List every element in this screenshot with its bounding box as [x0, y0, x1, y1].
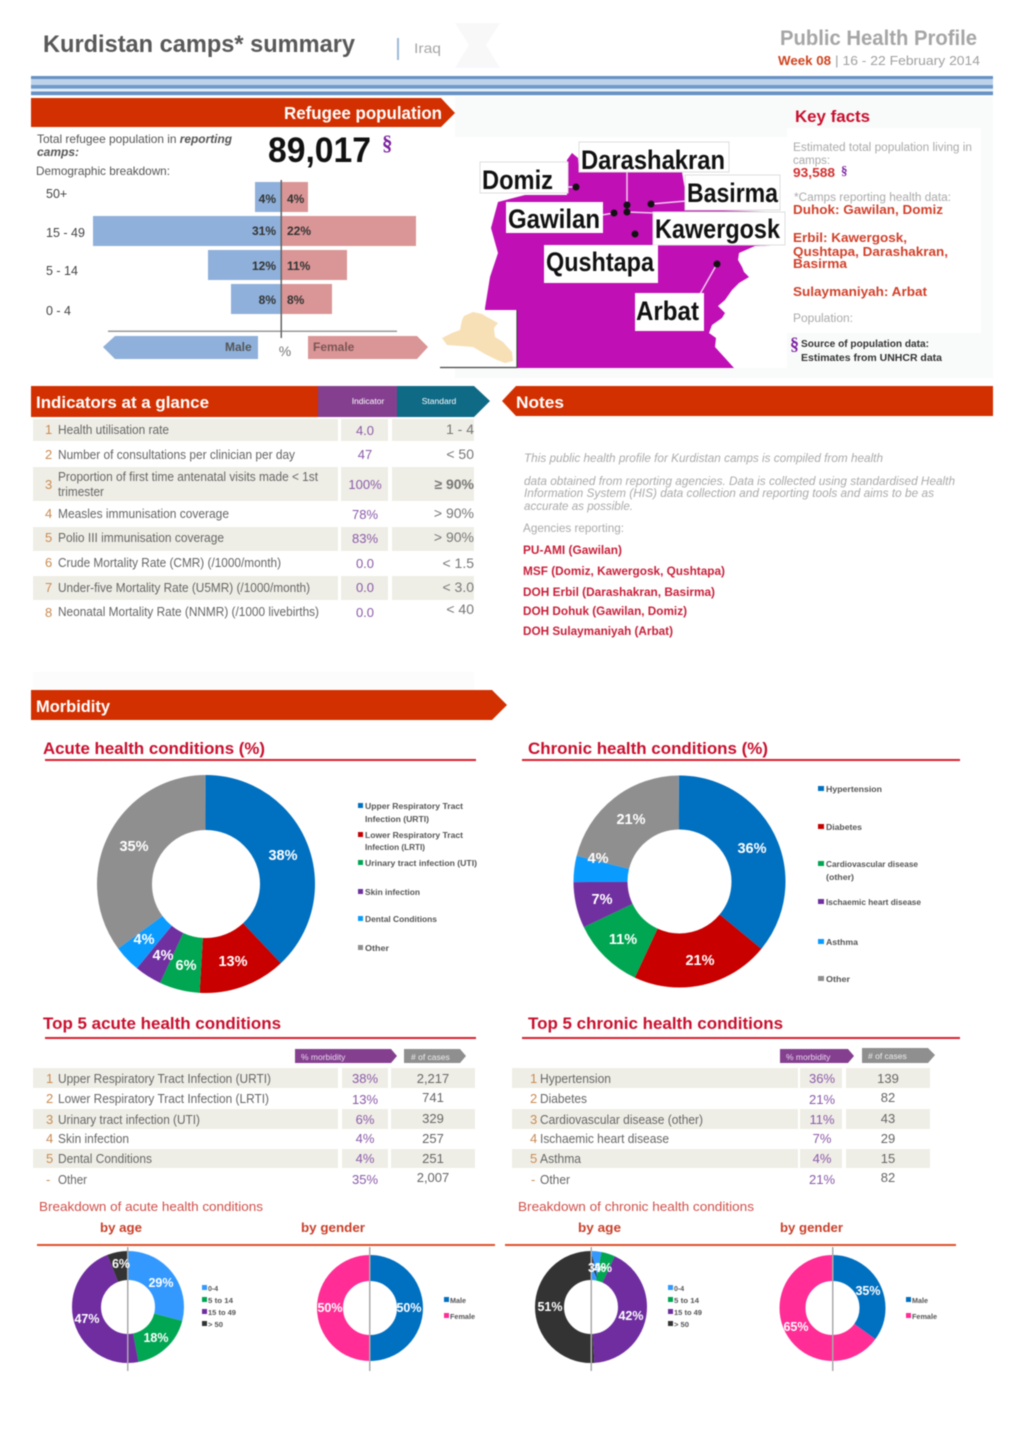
indicators table [33, 419, 475, 620]
population pyramid: 4% [287, 192, 305, 206]
donut chart: acute by age: 6% [112, 1257, 130, 1271]
indicators table: 83% [352, 531, 378, 546]
indicators table: ≥ 90% [434, 476, 475, 492]
panel: breakdown of chronic conditions [505, 1199, 956, 1371]
donut chart: chronic by age: 4% [594, 1261, 612, 1275]
key facts box: Estimated total population living in [793, 142, 972, 154]
population pyramid: 31% [252, 224, 276, 238]
panel: top 5 acute [33, 1014, 476, 1187]
label: Kawergosk: Kawergosk [655, 214, 781, 244]
legend: chronic: Asthma [826, 938, 859, 947]
indicators table: Neonatal Mortality Rate (NNMR) (/1000 livebirths) [58, 605, 319, 619]
table: top 5 acute: Skin infection [58, 1132, 129, 1146]
indicators table: Number of consultations per clinician per day [58, 448, 296, 462]
donut chart: acute: 6% [176, 958, 197, 974]
legend: acute by gender: Male [450, 1298, 466, 1305]
total figure: § [382, 131, 392, 155]
donut chart: chronic by gender [783, 1247, 881, 1371]
reporting agencies [523, 545, 725, 638]
notes text: Agencies reporting: [523, 521, 624, 535]
legend: chronic by gender: Female [912, 1314, 937, 1321]
legend: chronic: Ischaemic heart disease [826, 898, 922, 907]
table: top 5 acute: 251 [422, 1151, 444, 1166]
donut chart: acute: 4% [134, 932, 155, 948]
table: top 5 acute: - [46, 1172, 50, 1187]
donut chart: acute: 35% [119, 839, 149, 855]
indicators table: 4.0 [356, 423, 374, 438]
notes text [523, 451, 955, 535]
key facts box: 93,588 [793, 166, 835, 180]
population pyramid: 15 - 49 [46, 226, 85, 240]
report title: Public Health Profile [780, 27, 977, 50]
indicators table: < 50 [446, 446, 474, 462]
table: top 5 chronic: Asthma [540, 1152, 581, 1166]
reporting agencies: DOH Dohuk (Gawilan, Domiz) [523, 606, 687, 618]
heading: top 5 chronic: Top 5 chronic health conditions [528, 1014, 783, 1033]
heading: indicators bar: Indicators at a glance [36, 393, 209, 412]
legend: acute by age: 5 to 14 [208, 1298, 233, 1305]
total refugee text: camps: [37, 145, 79, 159]
donut chart: acute by age: 18% [143, 1331, 169, 1345]
heading: notes bar [502, 386, 993, 416]
heading: indicators bar: Indicator [352, 396, 384, 406]
legend: chronic: Hypertension [826, 785, 882, 794]
table: top 5 chronic: 29 [881, 1131, 895, 1146]
heading: notes bar: Notes [516, 393, 564, 412]
heading: key facts: Key facts [795, 107, 870, 126]
country label: Iraq [414, 40, 441, 56]
week and date [778, 54, 980, 68]
table: top 5 chronic: - [531, 1172, 535, 1187]
key facts box: Population: [793, 313, 853, 325]
column tag: % morbidity: % morbidity [301, 1052, 346, 1062]
key facts box: Erbil: Kawergosk, [793, 231, 907, 245]
donut chart: chronic by age: 3% [588, 1261, 606, 1275]
heading: breakdown chronic: by gender [780, 1220, 843, 1235]
total refugee text: Demographic breakdown: [36, 164, 170, 178]
legend: chronic by age: 15 to 49 [674, 1310, 702, 1317]
table: top 5 acute: 257 [422, 1131, 444, 1146]
heading: morbidity bar: Morbidity [36, 697, 111, 716]
donut chart: acute by gender: 50% [396, 1301, 422, 1315]
legend: acute: Lower Respiratory Tract [365, 831, 463, 840]
legend: chronic by gender [906, 1297, 937, 1321]
heading: breakdown acute [37, 1199, 495, 1246]
legend arrow: male: Male [225, 340, 252, 354]
heading: acute: Acute health conditions (%) [43, 739, 265, 758]
table: top 5 acute: 3 [46, 1112, 53, 1127]
heading: refugee population: Refugee population [284, 103, 442, 123]
indicators table: Crude Mortality Rate (CMR) (/1000/month) [58, 556, 281, 570]
table: top 5 acute: 5 [46, 1151, 53, 1166]
table: top 5 chronic: 36% [809, 1071, 835, 1086]
indicators table: 1 [45, 422, 52, 437]
label: Darashakran: Darashakran [581, 145, 725, 175]
indicators table: < 3.0 [442, 579, 474, 595]
heading: morbidity bar [31, 690, 507, 720]
table: top 5 acute: Other [58, 1173, 87, 1187]
population pyramid: 8% [259, 293, 276, 307]
column tag: # of cases: # of cases [411, 1052, 450, 1062]
column tag: # of cases chronic: # of cases [868, 1051, 907, 1061]
week and date: | 16 - 22 February 2014 [835, 54, 980, 68]
table: top 5 chronic: 3 [530, 1112, 537, 1127]
legend: acute by age: > 50 [208, 1322, 223, 1329]
heading: breakdown chronic: Breakdown of chronic health conditions [518, 1199, 755, 1214]
indicators table: 78% [352, 507, 378, 522]
indicators table: 5 [45, 530, 52, 545]
table: top 5 chronic: 139 [877, 1071, 899, 1086]
donut chart: chronic by age [537, 1247, 644, 1371]
panel: acute health conditions [43, 739, 477, 974]
table: top 5 acute: 1 [46, 1071, 53, 1086]
label: Qushtapa: Qushtapa [546, 247, 655, 277]
population pyramid: 50+ [46, 187, 67, 201]
week and date: Week 08 [778, 54, 831, 68]
total refugee text [36, 132, 233, 178]
indicators table: < 1.5 [442, 555, 474, 571]
population pyramid: 4% [259, 192, 276, 206]
donut chart: chronic: 11% [609, 932, 637, 948]
indicators table: Polio III immunisation coverage [58, 531, 224, 545]
population pyramid: 11% [287, 259, 311, 273]
total figure: 89,017 [268, 131, 371, 170]
label: Basirma: Basirma [687, 178, 779, 208]
reporting agencies: MSF (Domiz, Kawergosk, Qushtapa) [523, 566, 725, 578]
donut chart: chronic: 36% [737, 841, 767, 857]
indicators table: 3 [45, 477, 52, 492]
notes text: accurate as possible. [524, 499, 633, 513]
donut chart: chronic: 4% [588, 851, 609, 867]
donut chart: chronic: 21% [616, 812, 646, 828]
key facts box [787, 128, 981, 333]
reporting agencies: DOH Erbil (Darashakran, Basirma) [523, 587, 715, 599]
table: top 5 chronic: 4 [530, 1131, 537, 1146]
indicators table: 47 [358, 447, 372, 462]
label: Gawilan: Gawilan [508, 204, 600, 234]
table: top 5 acute: 35% [352, 1172, 378, 1187]
table: top 5 chronic: 21% [809, 1172, 835, 1187]
column tag: # of cases [404, 1049, 466, 1063]
table: top 5 acute: 329 [422, 1111, 444, 1126]
panel: chronic health conditions [522, 739, 960, 984]
page header [43, 27, 980, 68]
table: top 5 acute [33, 1068, 475, 1187]
indicators table: 0.0 [356, 556, 374, 571]
key facts box: Qushtapa, Darashakran, [793, 245, 948, 259]
indicators table: 0.0 [356, 580, 374, 595]
indicators table: trimester [58, 485, 104, 499]
table: top 5 acute: Upper Respiratory Tract Infection (URTI) [58, 1072, 271, 1086]
legend: chronic by age: > 50 [674, 1322, 689, 1329]
country label [397, 38, 441, 60]
legend: acute: Skin infection [365, 888, 420, 897]
indicators table: Proportion of first time antenatal visits made < 1st [58, 470, 318, 484]
indicators table: > 90% [434, 529, 474, 545]
population pyramid: 8% [287, 293, 305, 307]
table: top 5 acute: 741 [422, 1090, 444, 1105]
panel: breakdown of acute conditions [37, 1199, 495, 1371]
table: top 5 chronic: Other [540, 1173, 570, 1187]
key facts box: Sulaymaniyah: Arbat [793, 285, 928, 299]
indicators table: 1 - 4 [446, 421, 474, 437]
legend: chronic by age [668, 1285, 702, 1329]
donut chart: chronic by age: 42% [618, 1309, 644, 1323]
table: top 5 acute: 13% [352, 1092, 378, 1107]
legend arrow: male [103, 336, 258, 359]
column tag: # of cases chronic [862, 1048, 935, 1063]
table: top 5 acute: 6% [356, 1112, 375, 1127]
legend: acute: Urinary tract infection (UTI) [365, 859, 477, 868]
heading: chronic: Chronic health conditions (%) [528, 739, 768, 758]
indicators table: 100% [348, 477, 382, 492]
label: Arbat: Arbat [636, 296, 699, 326]
panel: notes [502, 386, 993, 638]
table: top 5 chronic: Ischaemic heart disease [540, 1132, 669, 1146]
indicators table: 8 [45, 605, 52, 620]
legend: chronic by age: 0-4 [674, 1286, 684, 1293]
table: top 5 chronic: Diabetes [540, 1092, 587, 1106]
legend: chronic by age: 5 to 14 [674, 1298, 699, 1305]
key facts box: § [841, 163, 848, 178]
table: top 5 chronic: 82 [881, 1170, 895, 1185]
table: top 5 chronic: 21% [809, 1092, 835, 1107]
heading: breakdown acute: by age [100, 1220, 142, 1235]
table: top 5 acute: 4% [356, 1151, 375, 1166]
legend: chronic: (other) [826, 873, 854, 882]
legend: acute: Other [365, 944, 389, 953]
key facts box: Duhok: Gawilan, Domiz [793, 203, 943, 217]
table: top 5 chronic [512, 1068, 930, 1187]
table: top 5 chronic: 7% [813, 1131, 832, 1146]
column tag: % morbidity chronic [780, 1049, 854, 1063]
legend: acute by gender: Female [450, 1314, 475, 1321]
notes text: Information System (HIS) data collection and reporting tools and aims to be as [524, 486, 934, 500]
table: top 5 chronic: 2 [530, 1091, 537, 1106]
table: top 5 chronic: 1 [530, 1071, 537, 1086]
reporting agencies: DOH Sulaymaniyah (Arbat) [523, 626, 673, 638]
legend: chronic [818, 785, 922, 984]
table: top 5 chronic: Hypertension [540, 1072, 611, 1086]
table: top 5 acute: Lower Respiratory Tract Infection (LRTI) [58, 1092, 269, 1106]
donut chart: acute by age: 29% [148, 1276, 174, 1290]
donut chart: chronic by age: 51% [537, 1300, 563, 1314]
indicators table: Under-five Mortality Rate (U5MR) (/1000/month) [58, 581, 310, 595]
legend: acute: Infection (LRTI) [365, 843, 425, 852]
table: top 5 acute: 4 [46, 1131, 53, 1146]
header stripes [31, 76, 993, 96]
donut chart: acute: 4% [153, 948, 174, 964]
legend: chronic: Cardiovascular disease [826, 860, 919, 869]
indicators table: 7 [45, 580, 52, 595]
table: top 5 acute: 38% [352, 1071, 378, 1086]
table: top 5 acute: 2,217 [417, 1071, 449, 1086]
indicators table: 0.0 [356, 605, 374, 620]
donut chart: chronic by gender: 35% [855, 1284, 881, 1298]
indicators table: Measles immunisation coverage [58, 507, 229, 521]
legend: acute by age: 15 to 49 [208, 1310, 236, 1317]
heading: breakdown acute: by gender [301, 1220, 365, 1235]
label: Domiz: Domiz [482, 165, 553, 195]
key facts box: *Camps reporting health data: [794, 192, 951, 204]
table: top 5 chronic: 82 [881, 1090, 895, 1105]
column tag: % morbidity chronic: % morbidity [786, 1052, 831, 1062]
heading: top 5 acute: Top 5 acute health conditions [43, 1014, 281, 1033]
table: top 5 acute: 4% [356, 1131, 375, 1146]
legend: acute: Infection (URTI) [365, 815, 429, 824]
donut chart: chronic: 7% [592, 892, 613, 908]
legend arrow: female: Female [313, 340, 355, 354]
donut chart: acute by gender [317, 1247, 422, 1371]
table: top 5 chronic: 11% [809, 1112, 835, 1127]
panel: key facts [787, 107, 981, 364]
donut chart: acute by age: 47% [74, 1312, 100, 1326]
donut chart: acute by gender: 50% [317, 1301, 343, 1315]
source note: Source of population data: [801, 339, 929, 350]
legend: acute by gender [444, 1297, 475, 1321]
panel: indicators at a glance [31, 386, 490, 620]
table: top 5 chronic: 4% [813, 1151, 832, 1166]
legend: acute by age: 0-4 [208, 1286, 218, 1293]
legend: chronic by gender: Male [912, 1298, 928, 1305]
indicators table: > 90% [434, 505, 474, 521]
population pyramid: 12% [252, 259, 276, 273]
source note: Estimates from UNHCR data [801, 353, 942, 364]
legend: acute by age [202, 1285, 236, 1329]
column tag: % morbidity [295, 1049, 397, 1063]
source note: § [790, 334, 799, 354]
table: top 5 acute: Dental Conditions [58, 1152, 152, 1166]
table: top 5 chronic: 43 [881, 1111, 895, 1126]
key facts box: camps: [793, 155, 830, 167]
key facts box: Basirma [793, 257, 848, 271]
heading: breakdown chronic [505, 1199, 956, 1246]
source note [790, 334, 942, 364]
population pyramid: 0 - 4 [46, 304, 71, 318]
title: Kurdistan camps* summary [43, 31, 356, 58]
heading: breakdown acute: Breakdown of acute health conditions [39, 1199, 264, 1214]
legend: chronic: Other [826, 975, 850, 984]
inset map: Iraq [440, 310, 517, 368]
notes text: data obtained from reporting agencies. Data is collected using standardised Health [524, 474, 955, 488]
legend arrow: female [308, 336, 428, 359]
heading: indicators bar: Standard [422, 396, 457, 406]
total refugee text: Total refugee population in reporting [37, 132, 233, 146]
table: top 5 chronic: 5 [530, 1151, 537, 1166]
donut chart: acute [119, 802, 298, 974]
indicators table: < 40 [446, 601, 474, 617]
table: top 5 chronic: 15 [881, 1151, 895, 1166]
map: Kurdistan region [485, 153, 785, 368]
heading: refugee population [31, 98, 455, 127]
population pyramid [46, 180, 416, 359]
indicators table: Health utilisation rate [58, 423, 169, 437]
donut chart: chronic: 21% [685, 953, 715, 969]
donut chart: acute: 38% [268, 848, 298, 864]
population pyramid: % [279, 343, 291, 359]
legend: acute: Upper Respiratory Tract [365, 802, 463, 811]
indicators table: 6 [45, 555, 52, 570]
notes text: This public health profile for Kurdistan camps is compiled from health [524, 451, 883, 465]
donut chart: chronic by gender: 65% [783, 1320, 809, 1334]
legend: chronic: Diabetes [826, 823, 863, 832]
reporting agencies: PU-AMI (Gawilan) [523, 545, 622, 557]
legend: acute: Dental Conditions [365, 915, 438, 924]
panel: map of camps [440, 137, 787, 368]
panel: refugee population [31, 98, 455, 359]
leader lines [567, 172, 717, 294]
heading: indicators bar [31, 386, 490, 417]
indicators table: 4 [45, 506, 52, 521]
table: top 5 acute: Urinary tract infection (UTI) [58, 1113, 200, 1127]
population pyramid: 22% [287, 224, 311, 238]
table: top 5 chronic: Cardiovascular disease (other) [540, 1113, 703, 1127]
heading: breakdown chronic: by age [578, 1220, 621, 1235]
population pyramid: 5 - 14 [46, 264, 78, 278]
donut chart: acute: 13% [218, 954, 248, 970]
donut chart: acute by age [74, 1247, 174, 1371]
indicators table: 2 [45, 447, 52, 462]
camp markers [572, 184, 720, 268]
table: top 5 acute: 2,007 [417, 1170, 449, 1185]
table: top 5 acute: 2 [46, 1091, 53, 1106]
legend: acute [358, 802, 477, 953]
panel: top 5 chronic [512, 1014, 960, 1187]
donut chart: chronic [588, 802, 767, 969]
